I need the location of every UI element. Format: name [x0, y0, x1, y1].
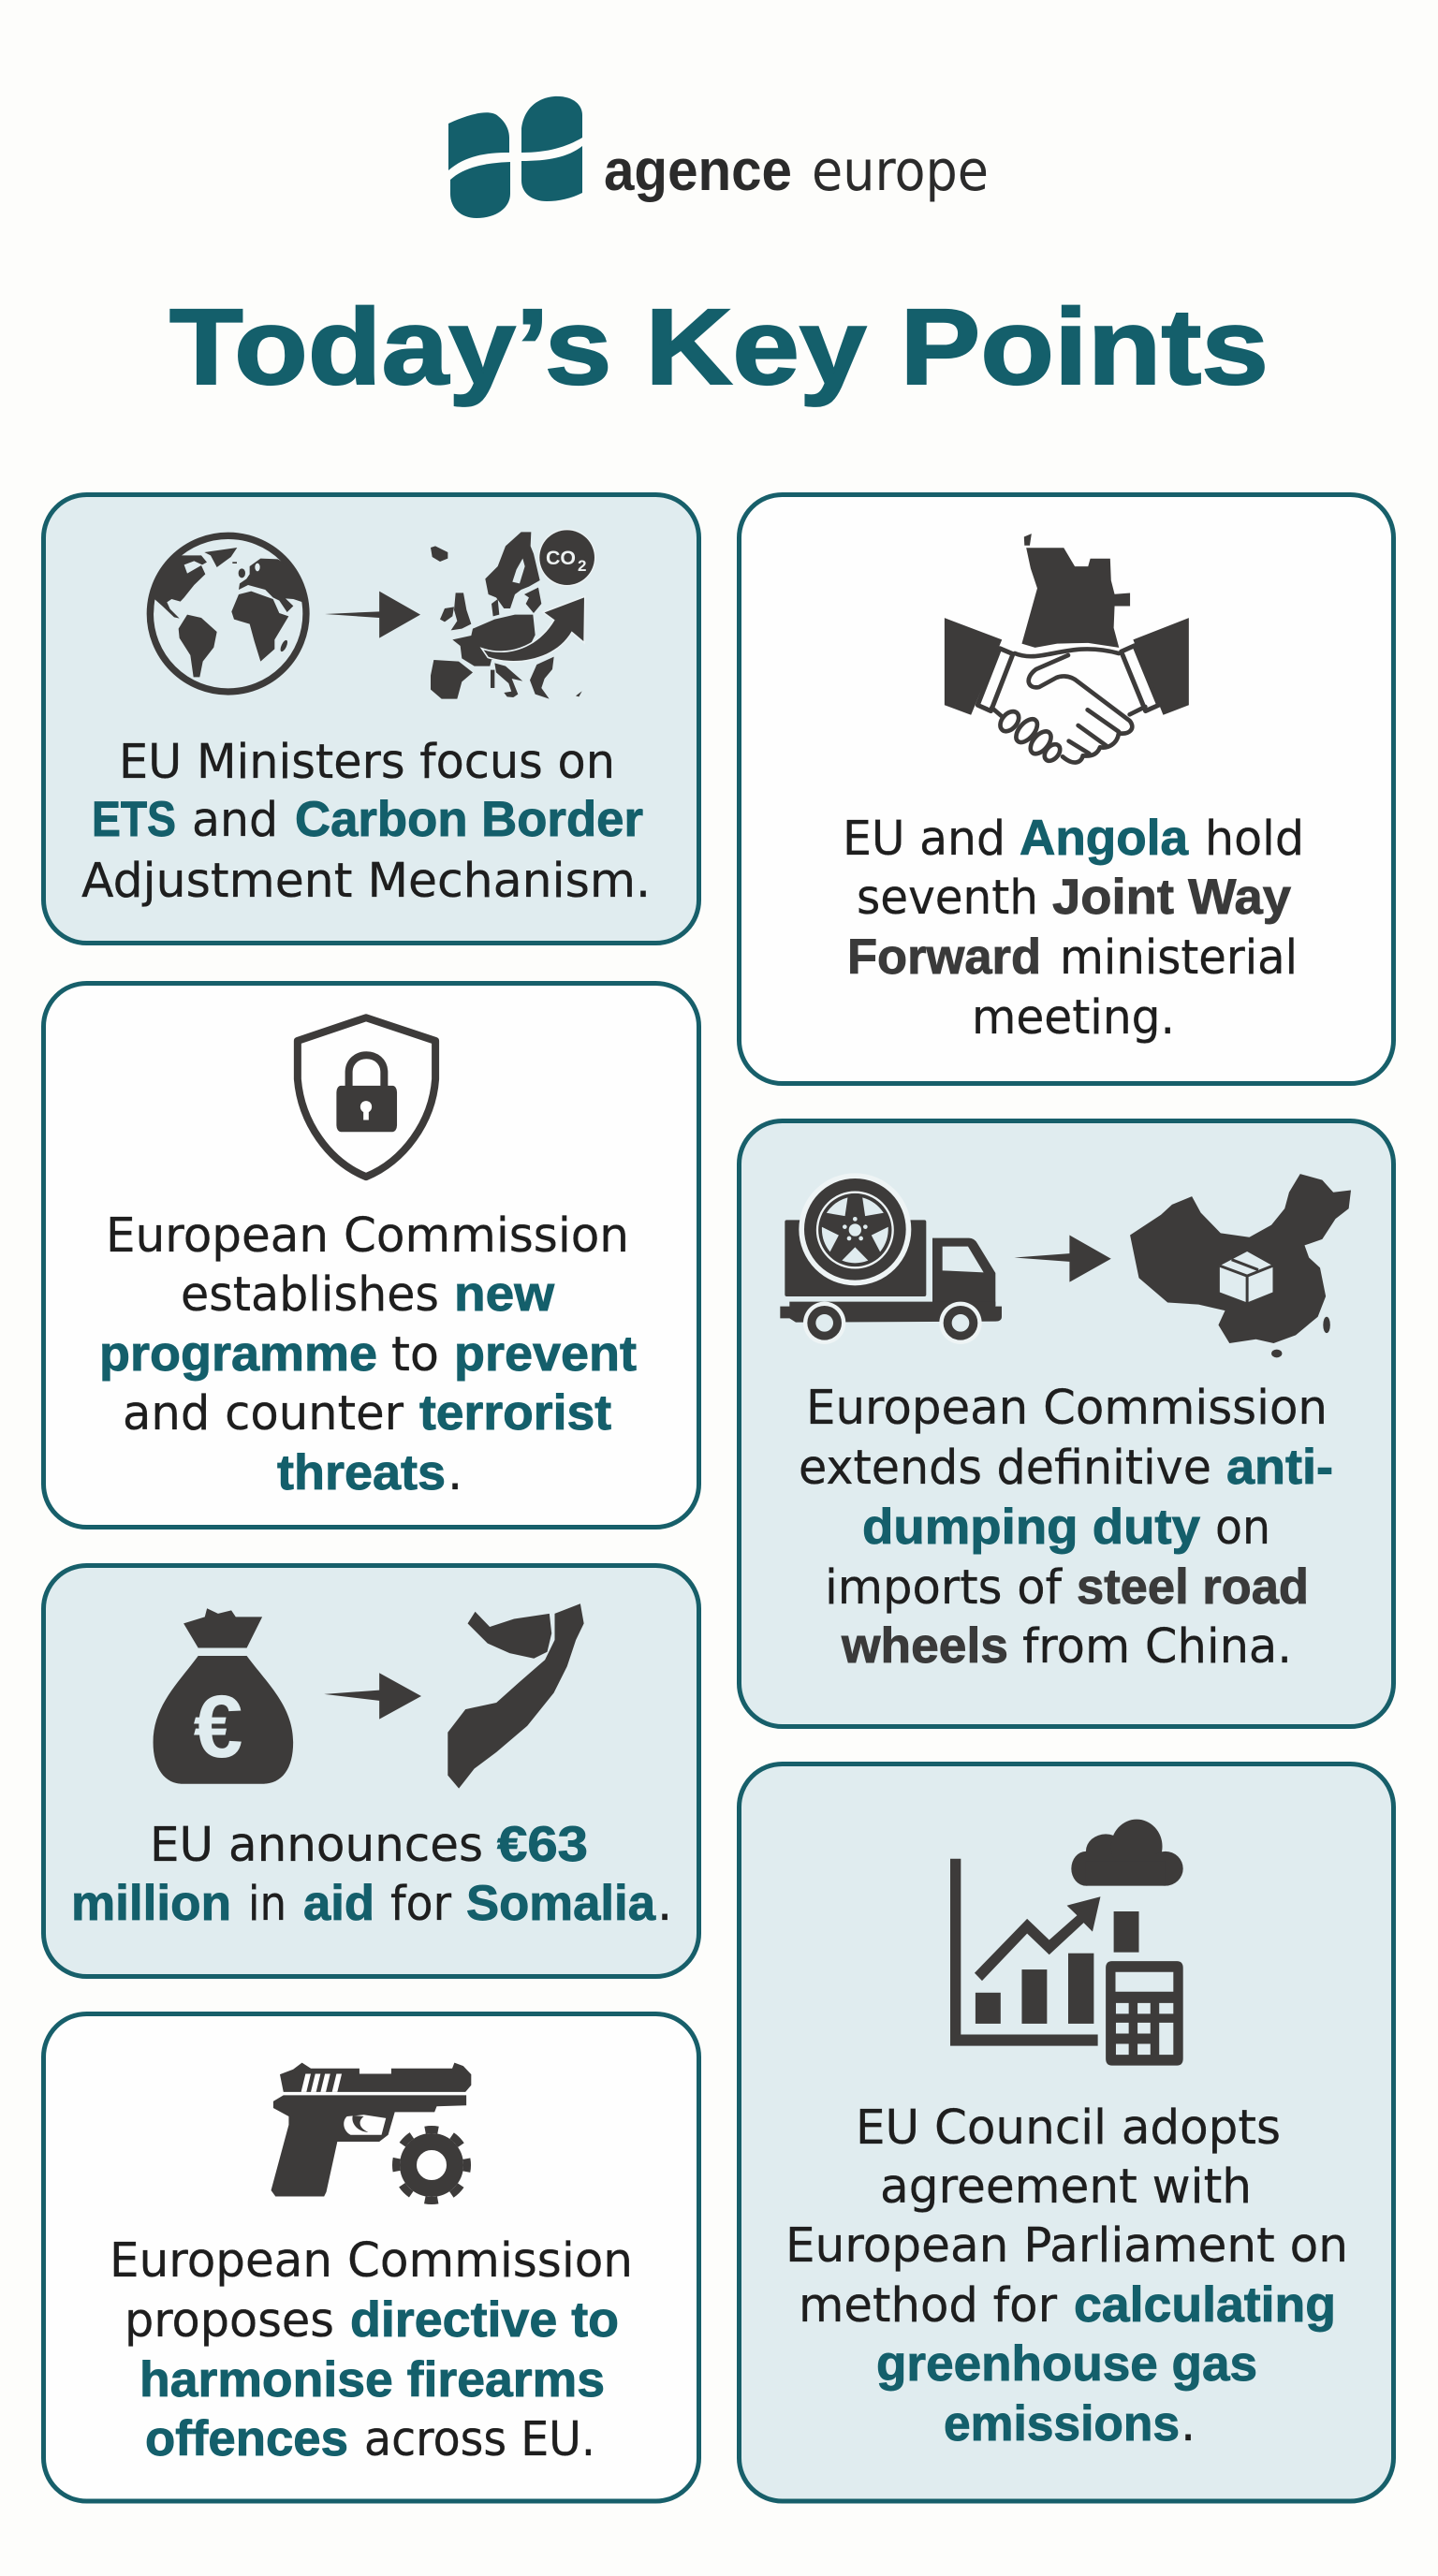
text: method for	[799, 2278, 1057, 2334]
text: for	[390, 1877, 451, 1932]
arrow	[1014, 1236, 1111, 1282]
text: prevent	[454, 1326, 637, 1382]
text: EU and	[843, 812, 1005, 867]
text: hold	[1205, 812, 1304, 867]
text: meeting.	[972, 990, 1175, 1046]
title: Today’s Key Points	[169, 287, 1269, 407]
text	[110, 2233, 633, 2467]
text: and	[192, 793, 278, 848]
logo wordmark	[604, 139, 989, 204]
text: €63	[497, 1817, 588, 1872]
text: directive to	[350, 2292, 619, 2348]
text: wheels	[841, 1618, 1008, 1674]
logo wordmark: europe	[812, 139, 989, 204]
panel: firearms directive	[43, 2014, 698, 2501]
text: Somalia	[466, 1876, 656, 1931]
text: to	[391, 1327, 439, 1383]
text: from China.	[1022, 1619, 1292, 1675]
text: European Commission	[806, 1381, 1328, 1436]
icon: shield with lock	[298, 1017, 435, 1177]
icon: Europe map with CO2: CO	[546, 548, 576, 569]
text: programme	[99, 1326, 377, 1382]
text: ministerial	[1060, 930, 1298, 986]
text: million	[71, 1876, 231, 1931]
text: seventh	[857, 871, 1038, 926]
text: .	[657, 1877, 672, 1932]
text: Adjustment Mechanism.	[81, 854, 651, 909]
text: EU Council adopts	[856, 2100, 1281, 2156]
text: offences	[145, 2411, 348, 2466]
arrow	[324, 1673, 421, 1720]
text: establishes	[181, 1267, 439, 1323]
text: steel road	[1077, 1559, 1309, 1615]
text: across EU.	[364, 2412, 595, 2467]
icon: chart, cloud and calculator	[950, 1820, 1183, 2066]
text	[799, 1381, 1333, 1675]
text: proposes	[125, 2293, 334, 2349]
text: in	[248, 1877, 286, 1932]
text: .	[448, 1446, 462, 1501]
icon: money bag	[154, 1608, 293, 1784]
text: calculating	[1074, 2277, 1336, 2333]
arrow	[325, 592, 420, 638]
text: EU Ministers focus on	[119, 735, 615, 790]
text: agreement with	[880, 2159, 1252, 2215]
text: dumping duty	[862, 1500, 1201, 1555]
text	[785, 2100, 1348, 2452]
text: Carbon Border	[295, 792, 643, 847]
panel: anti-dumping duty	[740, 1121, 1393, 1726]
text: terrorist	[419, 1385, 611, 1441]
icon: Europe map with CO2: 2	[578, 557, 586, 575]
text: .	[1181, 2397, 1196, 2452]
text: harmonise firearms	[139, 2352, 605, 2408]
text: European Commission	[110, 2233, 633, 2289]
text: European Commission	[106, 1208, 629, 1264]
text: new	[454, 1266, 555, 1322]
text	[99, 1208, 637, 1501]
text	[81, 735, 651, 909]
text: aid	[303, 1876, 374, 1931]
panel: EU and Angola	[740, 494, 1393, 1084]
text: and counter	[123, 1386, 404, 1442]
icon: Europe map with CO2	[431, 530, 594, 699]
panel: ETS and carbon border	[43, 494, 698, 944]
icon: Angola map over handshake	[945, 534, 1189, 764]
text: on	[1215, 1500, 1270, 1556]
text	[843, 811, 1304, 1046]
icon: truck with wheel	[780, 1173, 1002, 1344]
text: Joint Way	[1052, 870, 1292, 925]
text: extends definitive	[799, 1441, 1211, 1496]
text: ETS	[92, 792, 176, 847]
text: threats	[277, 1445, 446, 1500]
text: greenhouse gas	[876, 2336, 1257, 2392]
text: EU announces	[150, 1818, 483, 1873]
logo mark	[448, 96, 582, 218]
panel: aid for Somalia	[43, 1565, 698, 1977]
text: Angola	[1020, 811, 1189, 866]
text: imports of	[825, 1560, 1063, 1616]
text: anti-	[1226, 1440, 1333, 1495]
text: emissions	[944, 2396, 1180, 2452]
logo: agence europe	[448, 96, 989, 218]
panel: greenhouse gas emissions	[740, 1764, 1393, 2501]
icon: China map with parcel	[1130, 1174, 1351, 1357]
icon: pistol and gear	[271, 2063, 473, 2206]
icon: money bag: €	[194, 1677, 242, 1777]
icon: Somalia map	[448, 1603, 584, 1789]
icon: globe	[148, 535, 307, 692]
text: European Parliament on	[785, 2218, 1348, 2274]
logo wordmark: agence	[604, 139, 792, 203]
panel: new programme	[43, 983, 698, 1528]
text: Forward	[847, 929, 1041, 985]
text	[71, 1817, 672, 1932]
